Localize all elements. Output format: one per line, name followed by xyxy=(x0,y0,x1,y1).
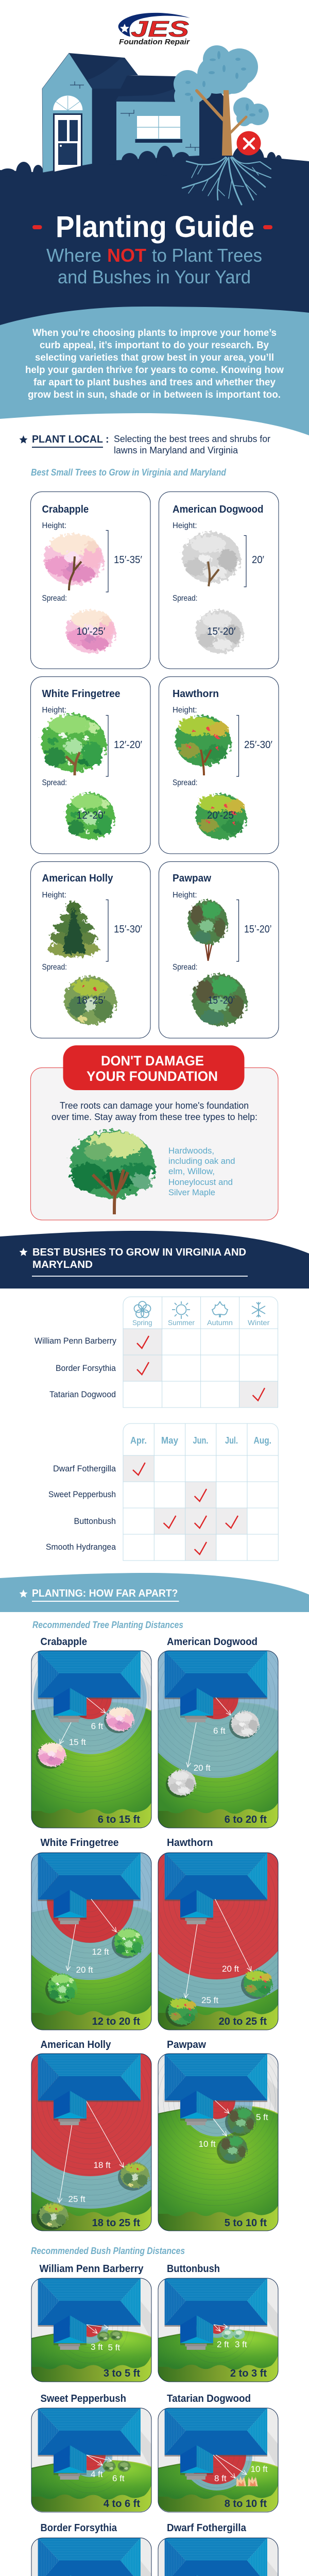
panel: american dogwood card: 20′ xyxy=(252,554,264,566)
plan: pawpaw xyxy=(158,2041,278,2231)
illustration: hawthorn tree xyxy=(175,716,231,775)
plan: pawpaw: 10 ft xyxy=(199,2139,216,2149)
plan: american dogwood: American Dogwood xyxy=(167,1636,258,1648)
check marks xyxy=(137,1336,265,1400)
plan: border forsythia: Border Forsythia xyxy=(40,2522,117,2534)
plan: hawthorn: 20 ft xyxy=(222,1964,239,1974)
plan: tatarian dogwood: 10 ft xyxy=(250,2464,268,2474)
heading: plant local: Selecting the best trees and shrubs for xyxy=(114,434,270,444)
plan: american holly: 18 ft xyxy=(94,2160,111,2170)
row labels xyxy=(46,1464,116,1552)
title: Planting Guide xyxy=(56,210,254,244)
plan: hawthorn: Hawthorn xyxy=(167,1837,213,1849)
hero: navy ground and house scene xyxy=(0,45,309,340)
plan: border forsythia xyxy=(31,2522,151,2576)
plan: tatarian dogwood: Tatarian Dogwood xyxy=(167,2393,251,2404)
subtitle: and Bushes in Your Yard xyxy=(58,266,251,287)
plan: crabapple: 6 ft xyxy=(91,1721,104,1731)
panel: white fringetree card xyxy=(31,677,150,854)
plan: american dogwood: 20 ft xyxy=(194,1763,211,1773)
plan: american dogwood: 6 to 20 ft xyxy=(225,1814,267,1825)
panel: white fringetree card: Height: xyxy=(42,706,66,715)
row labels: William Penn Barberry xyxy=(35,1336,116,1346)
panel: hawthorn card xyxy=(159,677,279,854)
plan: american holly: 18 to 25 ft xyxy=(92,2217,140,2229)
table: bloom by season xyxy=(35,1297,278,1408)
check marks xyxy=(133,1463,238,1554)
plan: sweet pepperbush: 4 ft xyxy=(91,2469,103,2479)
plan: hawthorn: 25 ft xyxy=(201,1995,218,2005)
intro text: When you’re choosing plants to improve your home’s xyxy=(32,327,277,338)
row labels: Border Forsythia xyxy=(56,1363,116,1373)
subtitle: NOT xyxy=(107,245,146,266)
warning text xyxy=(52,1100,258,1122)
intro text xyxy=(25,327,284,400)
spread: crabapple: 10′-25′ xyxy=(76,626,106,637)
section header: best bushes: BEST BUSHES TO GROW IN VIRGINIA AND xyxy=(32,1247,246,1258)
row labels: Dwarf Fothergilla xyxy=(53,1464,116,1473)
plan: white fringetree: White Fringetree xyxy=(40,1837,118,1849)
panel: american dogwood card: American Dogwood xyxy=(173,504,264,515)
icon: autumn leaf xyxy=(212,1301,228,1317)
intro text: grow best in sun, shade or in between is important too. xyxy=(28,389,281,400)
icon: winter snowflake xyxy=(252,1302,265,1317)
panel: crabapple card: 15′-35′ xyxy=(114,554,142,566)
plan: tatarian dogwood: 8 ft xyxy=(214,2473,227,2483)
spread: dogwood: 15′-20′ xyxy=(207,626,236,637)
callout banner: DON'T DAMAGE xyxy=(101,1053,204,1069)
panel: crabapple card xyxy=(31,492,150,669)
season labels: Autumn xyxy=(207,1318,233,1327)
heading: plant local: : xyxy=(106,434,109,445)
section header: best bushes: MARYLAND xyxy=(32,1259,93,1270)
house xyxy=(42,53,224,176)
subheading: recommended bush distances: Recommended Bush Planting Distances xyxy=(31,2246,185,2256)
row labels xyxy=(35,1336,116,1399)
illustration: dogwood tree xyxy=(182,532,240,586)
panel: pawpaw card: 15’-20’ xyxy=(244,924,272,935)
intro text: far apart to plant bushes and trees and whether they xyxy=(33,377,276,388)
spread: hawthorn xyxy=(196,794,246,839)
warning text: Tree roots can damage your home's foundation xyxy=(60,1100,249,1111)
plan: william penn barberry: 3 ft xyxy=(91,2342,103,2352)
spread: pawpaw: 15’-20’ xyxy=(208,995,235,1006)
plan: william penn barberry: 5 ft xyxy=(108,2343,120,2352)
plan: crabapple: 6 to 15 ft xyxy=(98,1814,140,1825)
panel: american dogwood card xyxy=(159,492,279,669)
illustration: crabapple tree xyxy=(44,534,104,590)
season labels: Summer xyxy=(168,1318,195,1327)
month labels: Jun. xyxy=(193,1435,208,1446)
plan: tatarian dogwood: 8 to 10 ft xyxy=(225,2498,267,2510)
panel: white fringetree card: Spread: xyxy=(42,778,67,787)
panel: american holly card: Spread: xyxy=(42,963,67,972)
plan: buttonbush: 3 ft xyxy=(235,2340,247,2349)
plan: sweet pepperbush: 6 ft xyxy=(112,2473,125,2483)
row labels: Buttonbush xyxy=(74,1516,116,1526)
spread: hawthorn: 20′-25′ xyxy=(207,810,236,821)
subtitle: to Plant Trees xyxy=(152,245,262,266)
heading: plant local xyxy=(20,434,270,455)
panel: crabapple card: Crabapple xyxy=(42,504,89,515)
section header: how far apart xyxy=(0,1573,309,1612)
plan: american dogwood: 6 ft xyxy=(213,1726,226,1736)
spread: fringetree xyxy=(66,793,114,839)
spread: holly: 18′-25′ xyxy=(76,995,106,1006)
plan: crabapple: Crabapple xyxy=(40,1636,87,1648)
panel: american dogwood card: Spread: xyxy=(173,594,198,603)
panel: american holly card: Height: xyxy=(42,891,66,900)
month labels xyxy=(130,1435,271,1446)
row labels: Smooth Hydrangea xyxy=(46,1542,116,1552)
spread: crabapple xyxy=(66,610,115,653)
plan: tatarian dogwood xyxy=(158,2393,278,2512)
list of trees to avoid: elm, Willow, xyxy=(168,1166,215,1176)
icon: summer sun xyxy=(172,1301,190,1319)
callout banner xyxy=(63,1045,244,1090)
panel: pawpaw card: Pawpaw xyxy=(173,873,211,884)
plan: sweet pepperbush xyxy=(31,2393,151,2512)
panel: pawpaw card: Height: xyxy=(173,891,197,900)
row labels: Sweet Pepperbush xyxy=(48,1489,116,1499)
plan: buttonbush: 2 to 3 ft xyxy=(230,2368,267,2379)
intro text: curb appeal, it’s important to do your research. By xyxy=(40,340,269,351)
subheading: recommended tree distances: Recommended Tree Planting Distances xyxy=(32,1620,183,1630)
month labels: Jul. xyxy=(225,1435,238,1446)
month labels: May xyxy=(161,1435,178,1446)
plan: white fringetree: 12 ft xyxy=(92,1947,109,1957)
logo: JES Foundation Repair xyxy=(118,13,190,46)
panel: hawthorn card: Hawthorn xyxy=(173,688,219,700)
panel: intro band xyxy=(0,307,309,435)
spread: holly xyxy=(64,976,116,1025)
intro text: help your garden thrive for years to come. Knowing how xyxy=(25,364,284,376)
spread: fringetree: 12′-20′ xyxy=(76,810,106,821)
plan: hawthorn xyxy=(158,1838,278,2030)
list of trees to avoid: Silver Maple xyxy=(168,1188,215,1197)
panel: american dogwood card: Height: xyxy=(173,521,197,530)
row labels: Tatarian Dogwood xyxy=(49,1389,116,1399)
panel: don't damage your foundation xyxy=(31,1045,278,1220)
plan: buttonbush xyxy=(158,2263,278,2382)
plan: pawpaw: Pawpaw xyxy=(167,2039,206,2050)
plan: white fringetree xyxy=(31,1838,151,2030)
spread: pawpaw xyxy=(192,974,247,1026)
month labels: Apr. xyxy=(130,1435,147,1446)
plan: white fringetree: 12 to 20 ft xyxy=(92,2016,140,2027)
table: bloom by month xyxy=(46,1423,278,1561)
warning text: over time. Stay away from these tree types to help: xyxy=(52,1112,258,1122)
panel: crabapple card: Height: xyxy=(42,521,66,530)
plan: dwarf fothergilla: Dwarf Fothergilla xyxy=(167,2522,247,2534)
panel: hawthorn card: 25′-30′ xyxy=(244,739,272,751)
logo: JES Foundation Repair: JES xyxy=(131,16,189,42)
plan: buttonbush: Buttonbush xyxy=(167,2263,220,2275)
plan: hawthorn: 20 to 25 ft xyxy=(219,2016,267,2027)
plan: dwarf fothergilla xyxy=(158,2522,278,2576)
subtitle xyxy=(46,245,262,287)
plan: crabapple: 15 ft xyxy=(69,1737,86,1747)
illustration: holly tree xyxy=(48,902,99,957)
tree with roots xyxy=(174,45,271,205)
plan: american holly: American Holly xyxy=(40,2039,111,2050)
panel: hawthorn card: Spread: xyxy=(173,778,198,787)
panel: crabapple card: Spread: xyxy=(42,594,67,603)
icon: spring flower xyxy=(134,1301,150,1318)
plan: american dogwood xyxy=(158,1637,278,1828)
list of trees to avoid: Honeylocust and xyxy=(168,1177,233,1187)
heading: plant local: lawns in Maryland and Virginia xyxy=(114,445,238,455)
panel: pawpaw card xyxy=(159,861,279,1038)
plan: pawpaw: 5 to 10 ft xyxy=(225,2217,267,2229)
list of trees to avoid xyxy=(168,1146,235,1197)
plan: white fringetree: 20 ft xyxy=(76,1965,93,1975)
panel: american holly card: American Holly xyxy=(42,873,113,884)
icon: red no-plant mark xyxy=(237,131,261,156)
intro text: selecting varieties that grow best in your area, you’ll xyxy=(35,352,274,363)
heading: plant local: PLANT LOCAL xyxy=(32,434,103,445)
section header: best bushes xyxy=(0,1231,309,1289)
season labels xyxy=(132,1318,270,1327)
plan: crabapple xyxy=(31,1637,151,1828)
panel: hawthorn card: Height: xyxy=(173,706,197,715)
season labels: Winter xyxy=(248,1318,270,1327)
plan: william penn barberry: William Penn Barberry xyxy=(39,2263,144,2275)
section header: how far apart: PLANTING: HOW FAR APART? xyxy=(32,1588,178,1599)
plan: william penn barberry xyxy=(31,2263,151,2382)
callout banner: YOUR FOUNDATION xyxy=(87,1069,218,1084)
panel: american holly card: 15′-30′ xyxy=(114,924,142,935)
illustration: fringetree xyxy=(42,714,106,775)
plan: william penn barberry: 3 to 5 ft xyxy=(104,2368,140,2379)
season labels: Spring xyxy=(132,1318,152,1327)
plan: sweet pepperbush: Sweet Pepperbush xyxy=(40,2393,126,2404)
plan: american holly xyxy=(31,2040,151,2231)
plan: pawpaw: 5 ft xyxy=(256,2112,268,2122)
illustration: pawpaw tree xyxy=(188,900,227,961)
illustration: hardwood tree xyxy=(71,1130,154,1214)
panel: pawpaw card: Spread: xyxy=(173,963,198,972)
subheading: best small trees: Best Small Trees to Grow in Virginia and Maryland xyxy=(31,467,227,478)
plan: sweet pepperbush: 4 to 6 ft xyxy=(104,2498,140,2510)
plan: buttonbush: 2 ft xyxy=(217,2340,229,2349)
plan: american holly: 25 ft xyxy=(68,2194,85,2204)
panel: white fringetree card: White Fringetree xyxy=(42,688,121,700)
list of trees to avoid: including oak and xyxy=(168,1156,235,1166)
logo: JES Foundation Repair: Foundation Repair xyxy=(119,38,190,46)
list of trees to avoid: Hardwoods, xyxy=(168,1146,214,1156)
subtitle: Where xyxy=(46,245,101,266)
panel: white fringetree card: 12′-20′ xyxy=(114,739,142,751)
panel: american holly card xyxy=(31,861,150,1038)
month labels: Aug. xyxy=(253,1435,271,1446)
spread: dogwood xyxy=(196,610,243,653)
